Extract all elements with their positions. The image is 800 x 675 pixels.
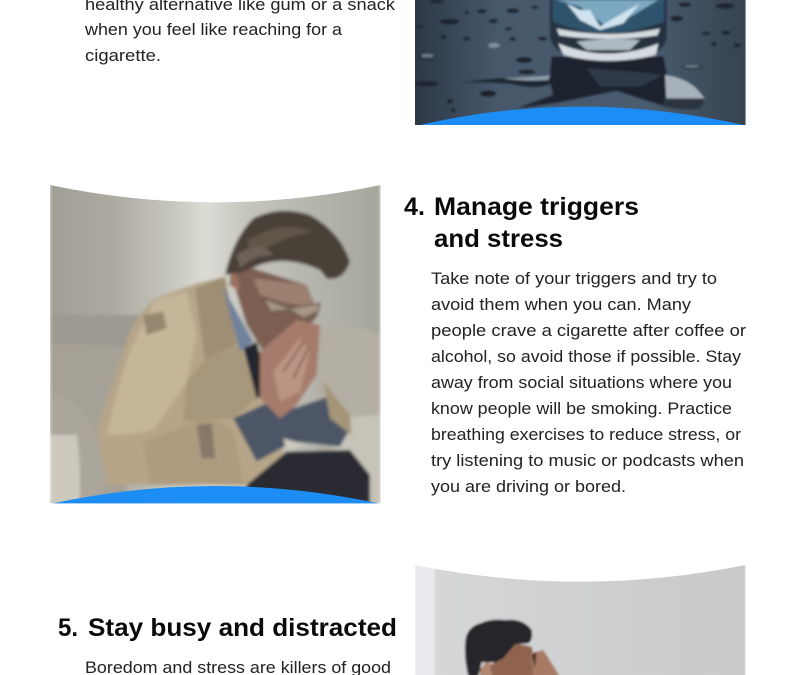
photo: man holding his head: [415, 562, 746, 675]
tip 4 body text: alcohol, so avoid those if possible. Stay: [431, 347, 742, 366]
sofa back: [73, 314, 140, 348]
tip 4 heading: and stress: [434, 225, 563, 253]
hand: [531, 650, 560, 675]
tip 4 body text: people crave a cigarette after coffee or: [431, 321, 746, 340]
tip 5 number: 5.: [58, 614, 78, 642]
tip 4 number: 4.: [404, 193, 425, 221]
sofa arm: [50, 392, 104, 503]
tip 4 body text: breathing exercises to reduce stress, or: [431, 425, 741, 444]
praying hands: [260, 320, 320, 418]
blue arc on water photo: [420, 107, 743, 125]
tip 4 body text: try listening to music or podcasts when: [431, 451, 744, 470]
face and ear: [480, 643, 538, 675]
tip 4 heading: [434, 193, 639, 253]
shirt and tie: [223, 287, 253, 352]
coat: [97, 277, 287, 485]
tip 4 body text: [431, 269, 746, 496]
tip 4 body text: away from social situations where you: [431, 373, 732, 392]
tip 5 heading: Stay busy and distracted: [88, 614, 397, 642]
glass of water: [549, 0, 668, 54]
tip 4 body text: Take note of your triggers and try to: [431, 269, 717, 288]
tip 4 body text: you are driving or bored.: [431, 477, 626, 496]
tip 3 body text: [84, 0, 396, 65]
panel: tip 4 text: [404, 193, 746, 496]
tip 3 body text: when you feel like reaching for a: [84, 20, 343, 39]
tip 4 body text: avoid them when you can. Many: [431, 295, 692, 314]
photo: worried man praying hands: [50, 182, 381, 505]
photo: glass of water on wet surface: [415, 0, 746, 125]
blue arc on man photo: [53, 486, 378, 503]
sleeve and trousers: [233, 395, 350, 462]
hair: [465, 620, 532, 675]
water droplets: [415, 0, 741, 112]
tip 3 body text: cigarette.: [85, 46, 161, 65]
hair: [225, 211, 350, 279]
spilled water: [462, 75, 553, 87]
head and face: [230, 268, 318, 352]
glasses: [263, 298, 320, 318]
panel: tip 3 text: [84, 0, 396, 65]
panel: tip 5 text: [58, 614, 397, 675]
tip 4 body text: know people will be smoking. Practice: [431, 399, 732, 418]
tip 4 heading: Manage triggers: [434, 193, 639, 221]
